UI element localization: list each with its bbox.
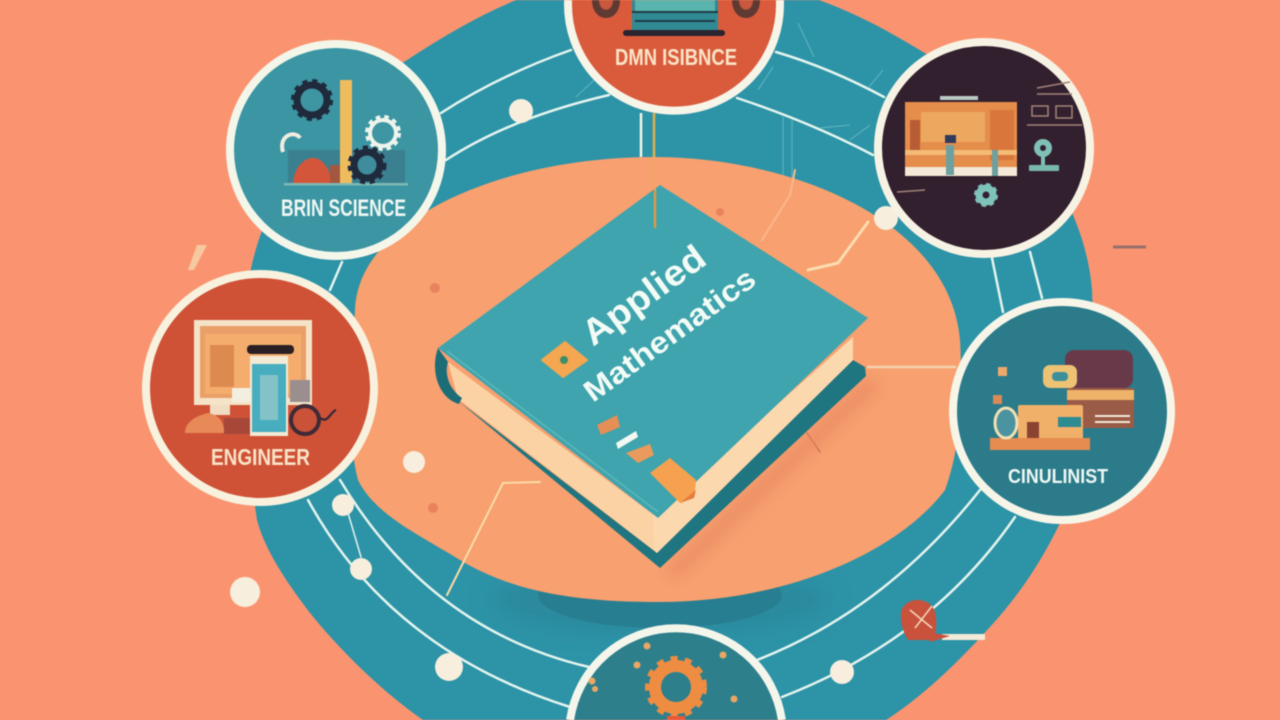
book title: Applied <box>574 236 713 353</box>
icon: building <box>905 96 1017 176</box>
label: ENGINEER <box>211 444 310 470</box>
book title: Mathematics <box>578 262 762 409</box>
icon: left dial <box>592 0 620 18</box>
icon: cloud base <box>185 413 224 433</box>
back cover <box>457 360 866 568</box>
icon: machinery <box>282 80 408 186</box>
ring connector lines <box>308 50 1042 707</box>
spine <box>435 348 462 404</box>
icon: phone <box>247 345 294 436</box>
label: BRIN SCIENCE <box>281 195 406 222</box>
brush mark <box>188 245 207 270</box>
grey dash <box>1113 246 1146 248</box>
circle: engineer <box>146 274 374 502</box>
cover emblem <box>542 342 587 377</box>
book title <box>574 236 762 409</box>
lower ring shade <box>538 562 782 628</box>
orange bookmark <box>650 458 696 503</box>
teal ring <box>244 0 1093 720</box>
icon: tree gear <box>1029 139 1059 171</box>
book <box>435 185 880 578</box>
icon: monitor <box>194 320 312 415</box>
decorative dots <box>230 99 898 684</box>
icon: gear <box>976 184 996 206</box>
disc <box>568 0 780 111</box>
circle: data science <box>568 0 780 111</box>
icon: gear ring <box>291 406 336 434</box>
rim <box>570 628 782 720</box>
circle: bottom gear <box>570 628 782 720</box>
circle: lab <box>878 42 1090 254</box>
label: DMN ISIBNCE <box>615 44 737 70</box>
circle: brain science <box>230 44 442 256</box>
connector lines on ellipse <box>447 170 955 595</box>
ring inner shading <box>490 564 830 636</box>
ellipse spots <box>428 208 724 513</box>
icon: blueprint marks <box>897 82 1082 192</box>
icon: right dial <box>732 0 760 18</box>
rim <box>568 0 780 111</box>
icon: cards and box <box>990 350 1134 450</box>
small dots <box>588 642 738 702</box>
book thread <box>641 113 655 228</box>
book shadow <box>662 375 880 578</box>
cover <box>438 185 868 518</box>
central orange ellipse <box>350 157 961 602</box>
circle: clinicalist <box>953 302 1171 520</box>
disc <box>570 628 782 720</box>
icon: gear <box>648 658 704 720</box>
icon: small red tool <box>901 600 985 642</box>
thin ring sketch marks <box>576 23 883 180</box>
pages <box>448 337 853 553</box>
cover small marks <box>597 415 654 463</box>
label: CINULINIST <box>1008 466 1108 488</box>
icon: laptop <box>623 0 725 36</box>
